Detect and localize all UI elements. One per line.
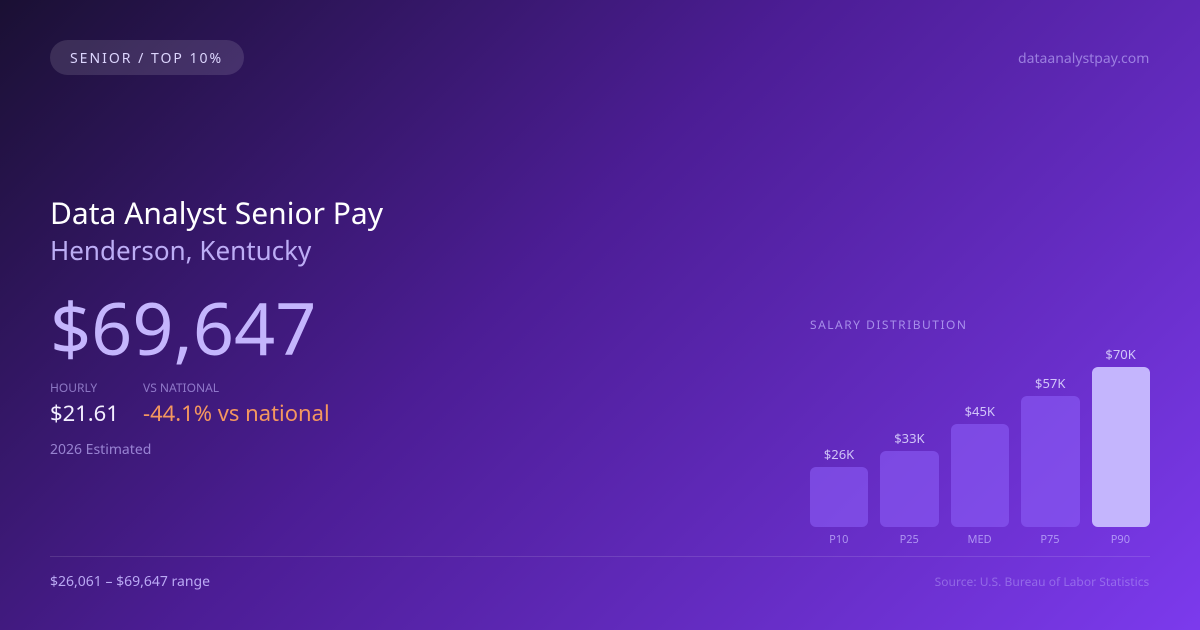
bar group: P25 [880,429,939,547]
title: Data Analyst Senior Pay [50,192,383,233]
comparison value: -44.1% vs national [143,398,330,428]
bar chart: salary distribution: $70K [1105,345,1136,363]
bar group: P75 [1021,374,1080,547]
source note: Source: U.S. Bureau of Labor Statistics [935,573,1149,590]
site domain: dataanalystpay.com [1018,49,1149,68]
salary range: $26,061 – $69,647 range [50,572,210,591]
bar group: P10 [810,445,868,547]
bar chart: salary distribution: MED [968,532,992,547]
location subtitle: Henderson, Kentucky [50,232,311,268]
badge text: SENIOR / TOP 10% [70,49,223,68]
bar chart: salary distribution: P25 [900,532,919,547]
bar chart: salary distribution: $26K [824,445,854,463]
hourly label: HOURLY [50,379,97,396]
bar chart: salary distribution: P10 [829,532,848,547]
bar group: P90 [1092,345,1150,547]
bar chart: salary distribution: P75 [1040,532,1060,547]
bar group: median [951,402,1009,547]
main salary figure: $69,647 [50,279,316,377]
comparison label: VS NATIONAL [143,379,219,396]
hourly stat [50,379,119,428]
bar chart: salary distribution: P90 [1111,532,1130,547]
hourly value: $21.61 [50,398,119,428]
bar chart: salary distribution: $45K [965,402,995,420]
badge: seniority [50,40,244,75]
national comparison stat [143,379,330,428]
chart heading: SALARY DISTRIBUTION [810,316,968,333]
estimate note: 2026 Estimated [50,440,151,459]
bar chart: salary distribution: $57K [1035,374,1065,392]
bar chart: salary distribution: $33K [894,429,925,447]
